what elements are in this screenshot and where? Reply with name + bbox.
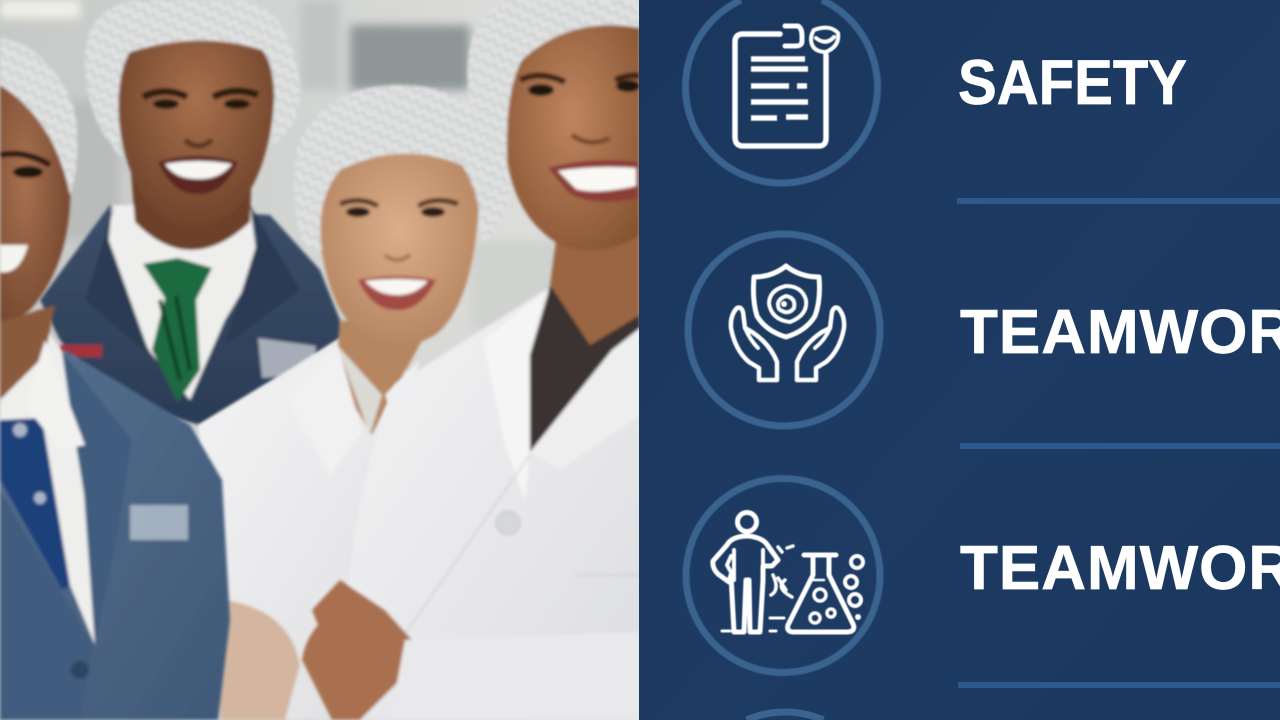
person: right woman in white lab coat: [302, 0, 640, 720]
icon: next ring cropped at page edge: [747, 712, 823, 720]
panel: navy values list: [639, 0, 1280, 720]
heading: safety: SAFETY: [958, 48, 1187, 118]
divider: safety: [957, 198, 1280, 204]
icon: person with flask: [686, 478, 880, 672]
icon: safety document with leaf: [686, 0, 877, 183]
divider: teamwork second: [958, 682, 1280, 688]
person: back left man in navy jacket: [40, 0, 346, 425]
icon: shield and caring hands: [688, 234, 880, 426]
person: left man in blue jacket: [0, 38, 230, 720]
photo: smiling laboratory team in hairnets and coats: [0, 0, 640, 720]
person: centre woman in white lab coat: [198, 85, 511, 720]
divider: teamwork: [960, 443, 1280, 449]
